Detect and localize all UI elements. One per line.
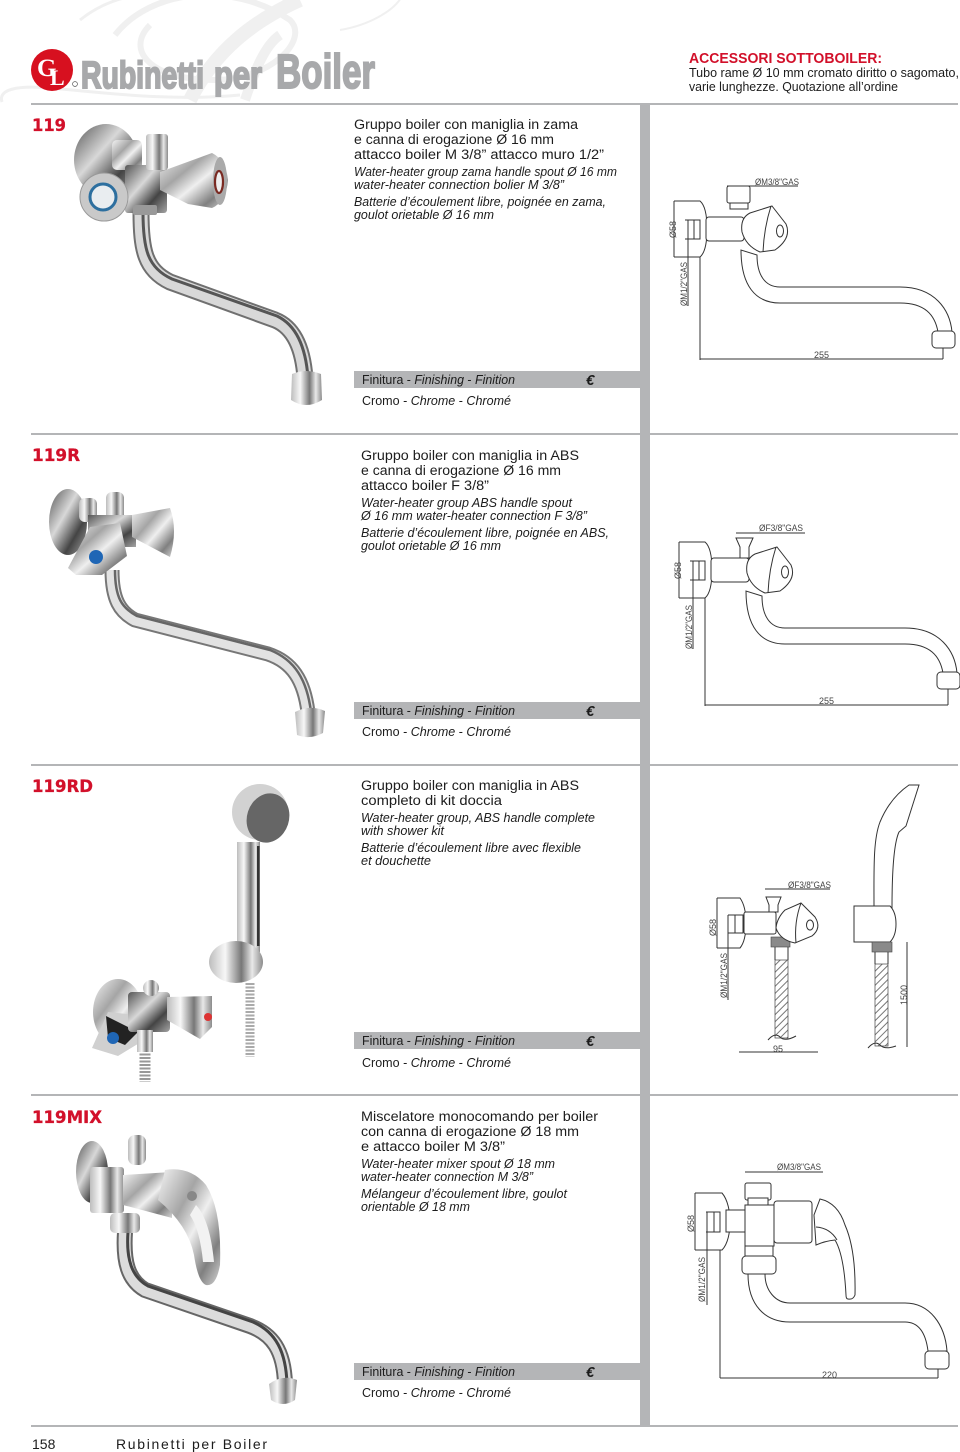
finish bar 119RD: Cromo - Chrome - Chromé xyxy=(362,1056,511,1070)
logo: GL red circle: L xyxy=(50,65,65,90)
description 119MIX: e attacco boiler M 3/8” xyxy=(361,1139,505,1155)
technical drawing 119MIX: 220 xyxy=(822,1370,837,1380)
description 119RD: Water-heater group, ABS handle complete xyxy=(361,811,595,825)
finish bar 119: € xyxy=(586,372,595,389)
finish bar 119MIX: Finitura - Finishing - Finition xyxy=(362,1365,515,1379)
photo: faucet 119MIX xyxy=(76,1135,297,1404)
description 119R xyxy=(360,448,609,553)
product code 119R: 119R xyxy=(32,446,80,466)
accessories note: varie lunghezze. Quotazione all’ordine xyxy=(689,79,898,94)
finish bar 119 xyxy=(354,371,640,408)
finish bar 119MIX: € xyxy=(586,1364,595,1381)
description 119R: attacco boiler F 3/8” xyxy=(361,478,489,494)
finish bar 119RD: € xyxy=(586,1033,595,1050)
footer xyxy=(32,1436,267,1452)
description 119: goulot orietable Ø 16 mm xyxy=(354,208,494,222)
product code 119: 119 xyxy=(32,116,66,136)
background swirl decoration xyxy=(1,0,402,102)
panel: product 119R xyxy=(32,446,960,739)
footer: 158 xyxy=(32,1436,56,1452)
title xyxy=(81,46,375,99)
description 119MIX: con canna di erogazione Ø 18 mm xyxy=(361,1124,579,1140)
description 119MIX: water-heater connection M 3/8” xyxy=(361,1170,534,1184)
description 119MIX xyxy=(361,1109,598,1214)
technical drawing 119R xyxy=(673,523,960,706)
technical drawing 119MIX xyxy=(686,1162,949,1380)
description 119R: Batterie d’écoulement libre, poignée en ABS, xyxy=(361,526,609,540)
description 119RD: with shower kit xyxy=(361,824,444,838)
description 119RD: Batterie d’écoulement libre avec flexible xyxy=(361,841,581,855)
technical drawing 119: ØM1/2"GAS xyxy=(679,262,689,306)
logo: GL red circle xyxy=(31,49,77,91)
description 119MIX: Water-heater mixer spout Ø 18 mm xyxy=(361,1157,555,1171)
title: Boiler xyxy=(276,46,375,99)
description 119MIX: orientable Ø 18 mm xyxy=(361,1200,470,1214)
photo: shower kit 119RD xyxy=(92,784,296,1082)
finish bar 119RD: Finitura - Finishing - Finition xyxy=(362,1034,515,1048)
description 119R: Gruppo boiler con maniglia in ABS xyxy=(361,448,579,464)
finish bar 119: Cromo - Chrome - Chromé xyxy=(362,394,511,408)
description 119MIX: Miscelatore monocomando per boiler xyxy=(361,1109,598,1125)
finish bar 119R xyxy=(354,702,640,739)
description 119RD xyxy=(361,778,595,868)
technical drawing 119MIX: Ø58 xyxy=(686,1215,696,1232)
technical drawing 119: ØM3/8"GAS xyxy=(755,177,799,187)
panel: product 119 xyxy=(32,116,955,408)
footer: Rubinetti per Boiler xyxy=(116,1436,267,1452)
description 119: e canna di erogazione Ø 16 mm xyxy=(354,132,554,148)
grey vertical band xyxy=(640,104,650,1426)
accessories note: ACCESSORI SOTTOBOILER: xyxy=(689,51,882,67)
title: per xyxy=(214,55,262,97)
product code 119RD: 119RD xyxy=(32,777,93,797)
technical drawing 119: Ø58 xyxy=(668,221,678,238)
technical drawing 119RD: Ø58 xyxy=(708,919,718,936)
finish bar 119R: Cromo - Chrome - Chromé xyxy=(362,725,511,739)
technical drawing 119RD: 95 xyxy=(773,1044,783,1054)
description 119R: goulot orietable Ø 16 mm xyxy=(361,539,501,553)
photo: faucet 119 xyxy=(74,124,322,405)
technical drawing 119R: ØF3/8"GAS xyxy=(759,523,803,533)
description 119: attacco boiler M 3/8” attacco muro 1/2” xyxy=(354,147,604,163)
photo: faucet 119R xyxy=(49,489,325,737)
finish bar 119MIX: Cromo - Chrome - Chromé xyxy=(362,1386,511,1400)
technical drawing 119MIX: ØM3/8"GAS xyxy=(777,1162,821,1172)
finish bar 119: Finitura - Finishing - Finition xyxy=(362,373,515,387)
description 119: Batterie d’écoulement libre, poignée en zama, xyxy=(354,195,606,209)
description 119R: e canna di erogazione Ø 16 mm xyxy=(361,463,561,479)
technical drawing 119R: Ø58 xyxy=(673,562,683,579)
finish bar 119R: Finitura - Finishing - Finition xyxy=(362,704,515,718)
description 119RD: Gruppo boiler con maniglia in ABS xyxy=(361,778,579,794)
technical drawing 119MIX: ØM1/2"GAS xyxy=(697,1257,707,1302)
accessories note xyxy=(689,51,959,94)
technical drawing 119R: 255 xyxy=(819,696,834,706)
description 119: Gruppo boiler con maniglia in zama xyxy=(354,117,578,133)
technical drawing 119: 255 xyxy=(814,350,829,360)
finish bar 119R: € xyxy=(586,703,595,720)
description 119RD: completo di kit doccia xyxy=(361,793,502,809)
description 119: water-heater connection bolier M 3/8” xyxy=(354,178,565,192)
description 119MIX: Mélangeur d’écoulement libre, goulot xyxy=(361,1187,567,1201)
panel: product 119RD xyxy=(32,777,919,1082)
description 119: Water-heater group zama handle spout Ø 16 mm xyxy=(354,165,617,179)
technical drawing 119RD xyxy=(708,785,919,1054)
finish bar 119MIX xyxy=(354,1363,640,1400)
finish bar 119RD xyxy=(354,1032,640,1070)
technical drawing 119RD: ØM1/2"GAS xyxy=(719,953,729,998)
logo: GL red circle: G xyxy=(37,55,56,82)
title: Rubinetti xyxy=(81,55,204,97)
technical drawing 119RD: ØF3/8"GAS xyxy=(788,880,831,890)
description 119 xyxy=(354,117,617,222)
product code 119MIX: 119MIX xyxy=(32,1108,102,1128)
description 119RD: et douchette xyxy=(361,854,431,868)
technical drawing 119RD: 1500 xyxy=(899,985,909,1005)
description 119R: Water-heater group ABS handle spout xyxy=(361,496,572,510)
technical drawing 119 xyxy=(668,177,955,360)
description 119R: Ø 16 mm water-heater connection F 3/8” xyxy=(360,509,588,523)
panel: product 119MIX xyxy=(32,1108,949,1404)
technical drawing 119R: ØM1/2"GAS xyxy=(684,605,694,649)
